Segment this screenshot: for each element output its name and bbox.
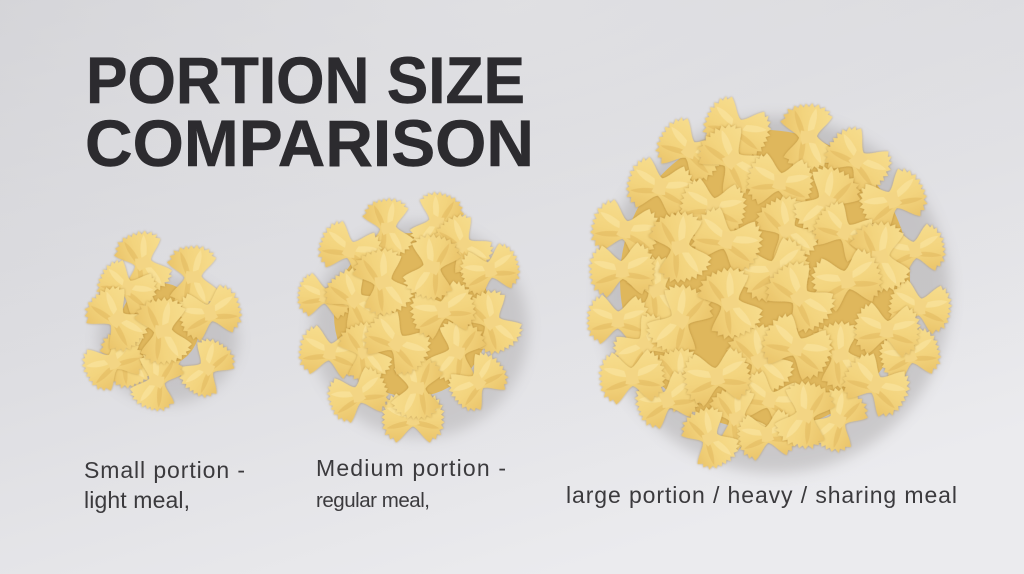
label: medium portion bbox=[316, 455, 506, 512]
title bbox=[85, 43, 534, 180]
label: small portion: Small portion - bbox=[84, 457, 245, 483]
title: PORTION SIZE bbox=[86, 43, 525, 117]
label: small portion: light meal, bbox=[84, 487, 190, 513]
label: medium portion: regular meal, bbox=[316, 489, 430, 512]
pasta pile: large portion bbox=[585, 90, 955, 476]
label: small portion bbox=[84, 457, 245, 513]
pasta pile: medium portion bbox=[295, 187, 529, 443]
pasta pile: small portion bbox=[75, 225, 247, 416]
label: medium portion: Medium portion - bbox=[316, 455, 506, 481]
label: large portion: large portion / heavy / sharing meal bbox=[566, 482, 957, 508]
title: COMPARISON bbox=[85, 106, 534, 180]
